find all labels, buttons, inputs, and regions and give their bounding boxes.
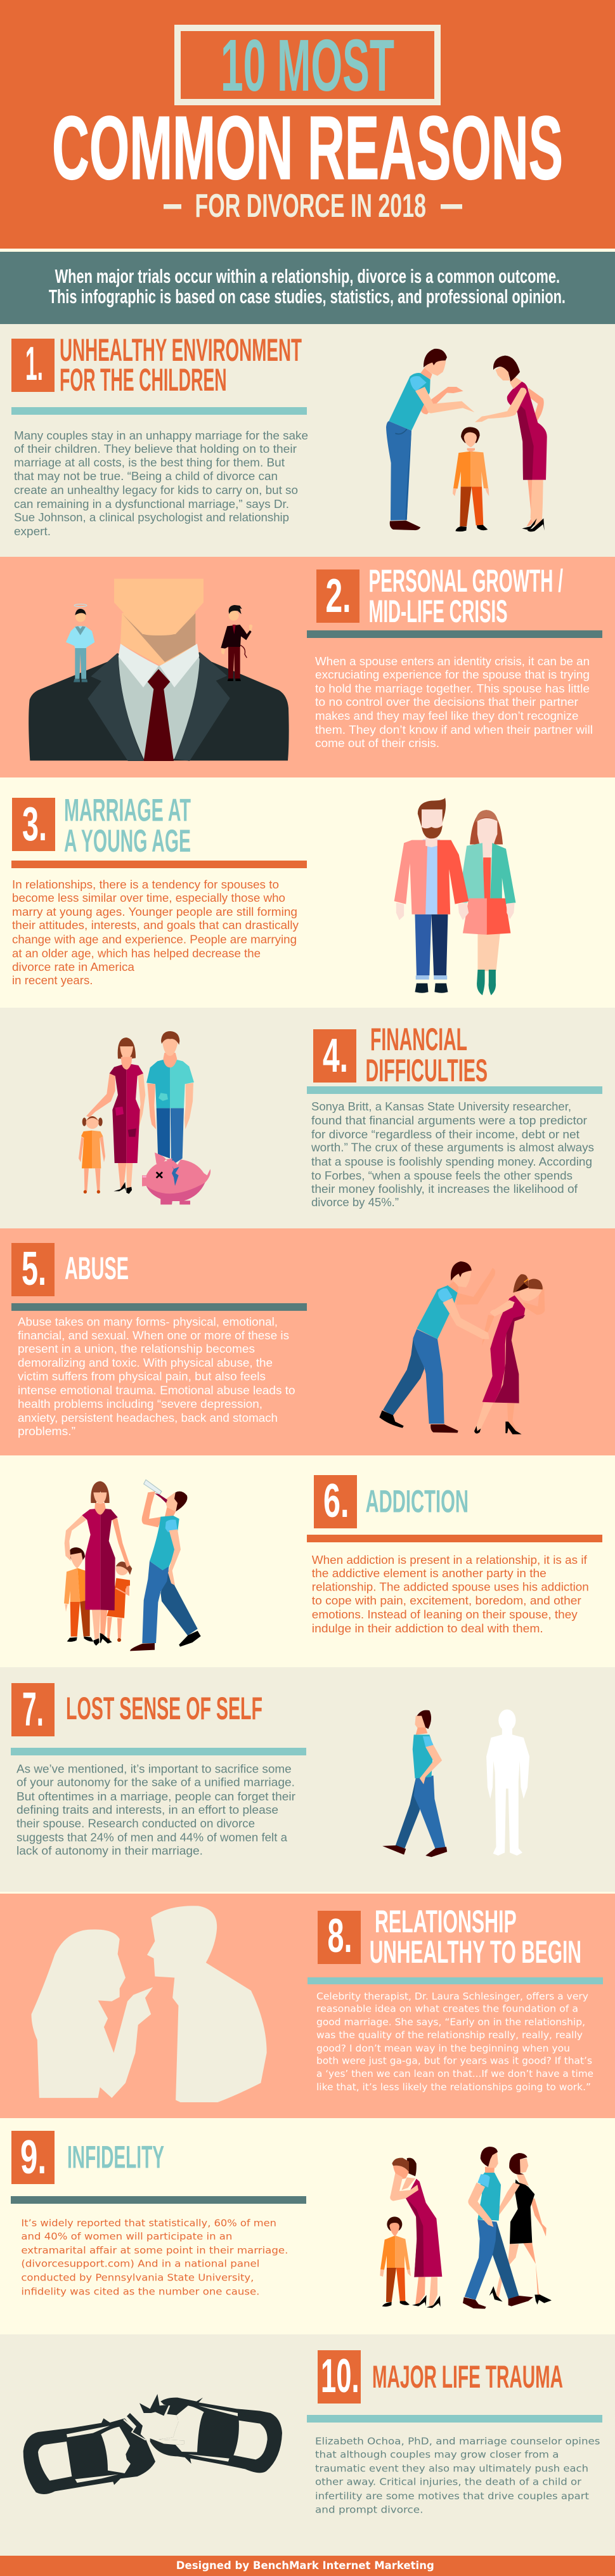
body text 7: their spouse. Research conducted on divorce	[16, 1816, 255, 1830]
heading: unhealthy environment	[60, 332, 302, 398]
subheading: for divorce in 2018: FOR DIVORCE IN 2018	[195, 188, 426, 224]
body text 4	[311, 1100, 594, 1209]
body text 2: to hold the marriage together. This spouse has little	[315, 682, 590, 695]
panel: reason 8	[0, 1894, 615, 2118]
body text 2: to no control over the decisions that their partner	[315, 695, 578, 708]
body text 3: marry at young ages. Younger people are still forming	[12, 905, 297, 918]
heading: infidelity: INFIDELITY	[67, 2140, 164, 2175]
panel: reason 3	[0, 777, 615, 1008]
body text 6: the addictive element is another party in the	[312, 1566, 547, 1580]
body text 3: at an older age, which has helped decrease the	[12, 947, 261, 960]
body text 10: and prompt divorce.	[315, 2504, 424, 2515]
body text 7: suggests that 24% of men and 44% of women felt a	[16, 1830, 288, 1844]
body text 1: create an unhealthy legacy for kids to carry on, but so	[14, 483, 298, 497]
heading: marriage at a young age: A YOUNG AGE	[64, 823, 191, 859]
body text 5: present in a union, the relationship becomes	[18, 1342, 255, 1355]
body text 4: for divorce “regardless of their income, debt or net	[311, 1128, 579, 1141]
panel: reason 10	[0, 2334, 615, 2556]
body text 5: health problems including “severe depression,	[18, 1397, 262, 1410]
icon: broken piggy bank	[142, 1152, 210, 1204]
body text 1: expert.	[14, 524, 51, 538]
body text 9: extramarital affair at some point in their marriage.	[21, 2244, 288, 2256]
number badge 2	[316, 569, 359, 623]
body text 10: infertility are some motives that drive couples apart	[315, 2490, 589, 2502]
body text 5: victim suffers from physical pain, but also feels	[18, 1370, 266, 1382]
body text 8: Celebrity therapist, Dr. Laura Schlesinger, offers a very	[316, 1991, 588, 2002]
body text 5: Abuse takes on many forms- physical, emotional,	[18, 1315, 278, 1329]
body text 2: When a spouse enters an identity crisis, it can be an	[315, 654, 590, 668]
footer	[0, 2556, 615, 2576]
number badge 10: 10.	[321, 2349, 359, 2402]
body text 6: When addiction is present in a relationship, it is as if	[312, 1553, 588, 1566]
heading: addiction: ADDICTION	[365, 1484, 469, 1519]
panel: reason 2	[0, 557, 615, 777]
heading: financial difficulties	[365, 1022, 488, 1088]
panel: reason 1	[0, 324, 615, 557]
number badge 2: 2.	[326, 569, 351, 622]
illustration: woman and child with cheating couple	[380, 2147, 552, 2309]
body text 1: can remaining in a dysfunctional marriage,” says Dr.	[14, 497, 289, 511]
number badge 9	[11, 2130, 55, 2184]
heading: marriage at a young age	[64, 793, 191, 859]
body text 5: anxiety, persistent headaches, back and stomach	[18, 1411, 278, 1424]
icon: wine bottle	[144, 1480, 167, 1503]
body text 6: indulge in their addiction to deal with them.	[312, 1622, 543, 1635]
number badge 8: 8.	[327, 1909, 353, 1962]
body text 4: Sonya Britt, a Kansas State University researcher,	[311, 1100, 571, 1113]
body text 1: of their children. They believe that holding on to their	[14, 442, 297, 455]
body text 4: to Forbes, “when a spouse feels the other spends	[311, 1169, 573, 1182]
body text 3: In relationships, there is a tendency for spouses to	[12, 878, 279, 891]
number badge 4	[313, 1029, 356, 1083]
number badge 1: 1.	[25, 337, 43, 390]
body text 9: (divorcesupport.com) And in a national panel	[21, 2258, 259, 2269]
body text 5: demoralizing and toxic. With physical abuse, the	[18, 1356, 273, 1369]
heading: relationship unhealthy to begin	[370, 1904, 581, 1970]
number badge 4: 4.	[323, 1029, 348, 1082]
number badge 10	[318, 2349, 361, 2404]
subheading: for divorce in 2018	[164, 188, 462, 224]
panel: intro	[0, 252, 615, 324]
heading: financial difficulties: FINANCIAL	[370, 1022, 467, 1057]
body text 8: good? I don’t mean way in the beginning when you	[316, 2043, 570, 2054]
body text 4: that a spouse is foolishly spending money. According	[311, 1155, 592, 1168]
body text 7: of your autonomy for the sake of a unified marriage.	[16, 1776, 295, 1789]
heading: abuse: ABUSE	[65, 1251, 129, 1286]
body text 1: marriage at all costs, is the best thing for them. But	[14, 456, 285, 469]
number badge 5	[11, 1242, 55, 1296]
number badge 6: 6.	[323, 1474, 349, 1527]
panel: reason 6	[0, 1455, 615, 1667]
heading: marriage at a young age: MARRIAGE AT	[64, 793, 191, 828]
body text 3: change with age and experience. People are marrying	[12, 933, 297, 946]
illustration: car crash	[23, 2394, 282, 2494]
body text 9: It’s widely reported that statistically, 60% of men	[21, 2218, 276, 2229]
body text 9: conducted by Pennsylvania State University,	[21, 2272, 254, 2284]
number badge 7	[11, 1682, 55, 1736]
body text 2: excruciating experience for the spouse that is trying	[315, 668, 590, 681]
panel: reason 5	[0, 1228, 615, 1455]
body text 1: that may not be true. “Being a child of divorce can	[14, 469, 278, 483]
number badge 3: 3.	[22, 797, 47, 850]
body text 4: their money foolishly, it increases the likelihood of	[311, 1182, 578, 1195]
body text 10: Elizabeth Ochoa, PhD, and marriage counselor opines	[315, 2436, 600, 2447]
body text 10: other away. Critical injuries, the death of a child or	[315, 2476, 582, 2487]
number badge 8	[318, 1909, 361, 1964]
body text 7: defining traits and interests, in an effort to please	[16, 1803, 278, 1816]
illustration: suit with angel and devil on shoulders	[29, 579, 289, 761]
body text 2: makes and they may feel like they don’t recognize	[315, 709, 578, 722]
body text 7: As we’ve mentioned, it’s important to sacrifice some	[16, 1762, 292, 1776]
body text 2: them. They don’t know if and when their partner will	[315, 723, 593, 736]
body text 8: reasonable idea on what creates the foundation of a	[316, 2003, 578, 2015]
heading: unhealthy environment: FOR THE CHILDREN	[60, 362, 227, 398]
number badge 7: 7.	[22, 1682, 44, 1736]
body text 3: become less similar over time, especially those who	[12, 891, 285, 904]
body text 2	[315, 654, 593, 750]
panel: reason 7	[0, 1667, 615, 1894]
number badge 9: 9.	[20, 2130, 46, 2183]
number badge 6	[314, 1474, 357, 1528]
heading: lost sense of self: LOST SENSE OF SELF	[66, 1691, 262, 1726]
panel: reason 9	[0, 2118, 615, 2334]
body text 7: lack of autonomy in their marriage.	[16, 1844, 203, 1857]
body text 9: and 40% of women will participate in an	[21, 2231, 232, 2242]
body text 9	[21, 2218, 288, 2297]
illustration: parents arguing over child	[386, 349, 547, 531]
body text 8: like that, it’s less likely the relationships going to work.”	[316, 2081, 591, 2093]
body text 6	[312, 1553, 589, 1635]
body text 7: But oftentimes in a marriage, people can forget their	[16, 1790, 295, 1803]
title box: 10 most	[178, 24, 437, 107]
body text 2: come out of their crisis.	[315, 736, 439, 750]
number badge 5: 5.	[22, 1242, 46, 1295]
icon: white silhouette	[486, 1709, 529, 1856]
body text 4: divorce by 45%.”	[311, 1195, 399, 1209]
body text 5	[18, 1315, 295, 1438]
body text 9: infidelity was cited as the number one cause.	[21, 2286, 259, 2297]
illustration: man drinking beside family	[64, 1480, 201, 1651]
heading: financial difficulties: DIFFICULTIES	[365, 1053, 488, 1088]
body text 8	[316, 1991, 593, 2093]
body text 10	[315, 2436, 600, 2515]
illustration: family with broken piggy bank	[79, 1031, 210, 1204]
body text 3: in recent years.	[12, 973, 93, 987]
body text 7	[16, 1762, 295, 1857]
illustration: young couple	[394, 798, 515, 995]
body text 3	[12, 878, 299, 987]
number badge 3	[12, 797, 55, 851]
panel: header	[0, 0, 615, 252]
body text 1: Many couples stay in an unhappy marriage for the sake	[14, 429, 308, 442]
illustration: man walking from white silhouette	[382, 1709, 529, 1857]
illustration: man grabbing woman	[379, 1261, 545, 1434]
body text 6: emotions. Instead of leaning on their spouse, they	[312, 1608, 578, 1621]
body text 6: to cope with pain, excitement, boredom, and other	[312, 1594, 581, 1607]
heading: personal growth: MID-LIFE CRISIS	[369, 594, 507, 629]
body text 10: traumatic event they also may ultimately push each	[315, 2462, 588, 2474]
body text 3: their attitudes, interests, and goals that can drastically	[12, 918, 299, 932]
body text 4: worth.” The crux of these arguments is almost always	[311, 1141, 594, 1154]
body text 1	[14, 429, 308, 538]
body text 5: problems.”	[18, 1424, 75, 1438]
body text 8: was the quality of the relationship really, really, really	[316, 2029, 583, 2041]
title box: 10 most: 10 MOST	[221, 24, 394, 107]
body text 5: intense emotional trauma. Emotional abuse leads to	[18, 1384, 295, 1396]
body text 8: both were just ga-ga, but for years was it good? If that’s	[316, 2055, 592, 2067]
body text 8: a ‘yes’ then we can lean on that...If we don’t have a time	[316, 2068, 593, 2079]
body text 10: that although couples may grow closer from a	[315, 2449, 559, 2461]
body text 4: found that financial arguments were a top predictor	[311, 1114, 587, 1127]
panel: reason 4	[0, 1008, 615, 1228]
icon: devil	[221, 605, 252, 681]
body text 5: financial, and sexual. When one or more of these is	[18, 1329, 289, 1342]
body text 8: good marriage. She says, “Early on in the relationship,	[316, 2017, 585, 2028]
illustration: arguing couple silhouettes	[31, 1906, 267, 2102]
number badge 1	[11, 337, 55, 392]
footer: Designed by BenchMark Internet Marketing	[176, 2560, 434, 2572]
heading: unhealthy environment: UNHEALTHY ENVIRONMENT	[60, 332, 302, 368]
icon: angel	[66, 604, 94, 682]
body text 6: relationship. The addicted spouse uses his addiction	[312, 1580, 589, 1594]
heading: relationship unhealthy to begin: RELATIONSHIP	[375, 1904, 517, 1939]
heading: personal growth	[369, 563, 563, 629]
body text 3: divorce rate in America	[12, 960, 135, 973]
body text 1: Sue Johnson, a clinical psychologist and relationship	[14, 511, 289, 524]
